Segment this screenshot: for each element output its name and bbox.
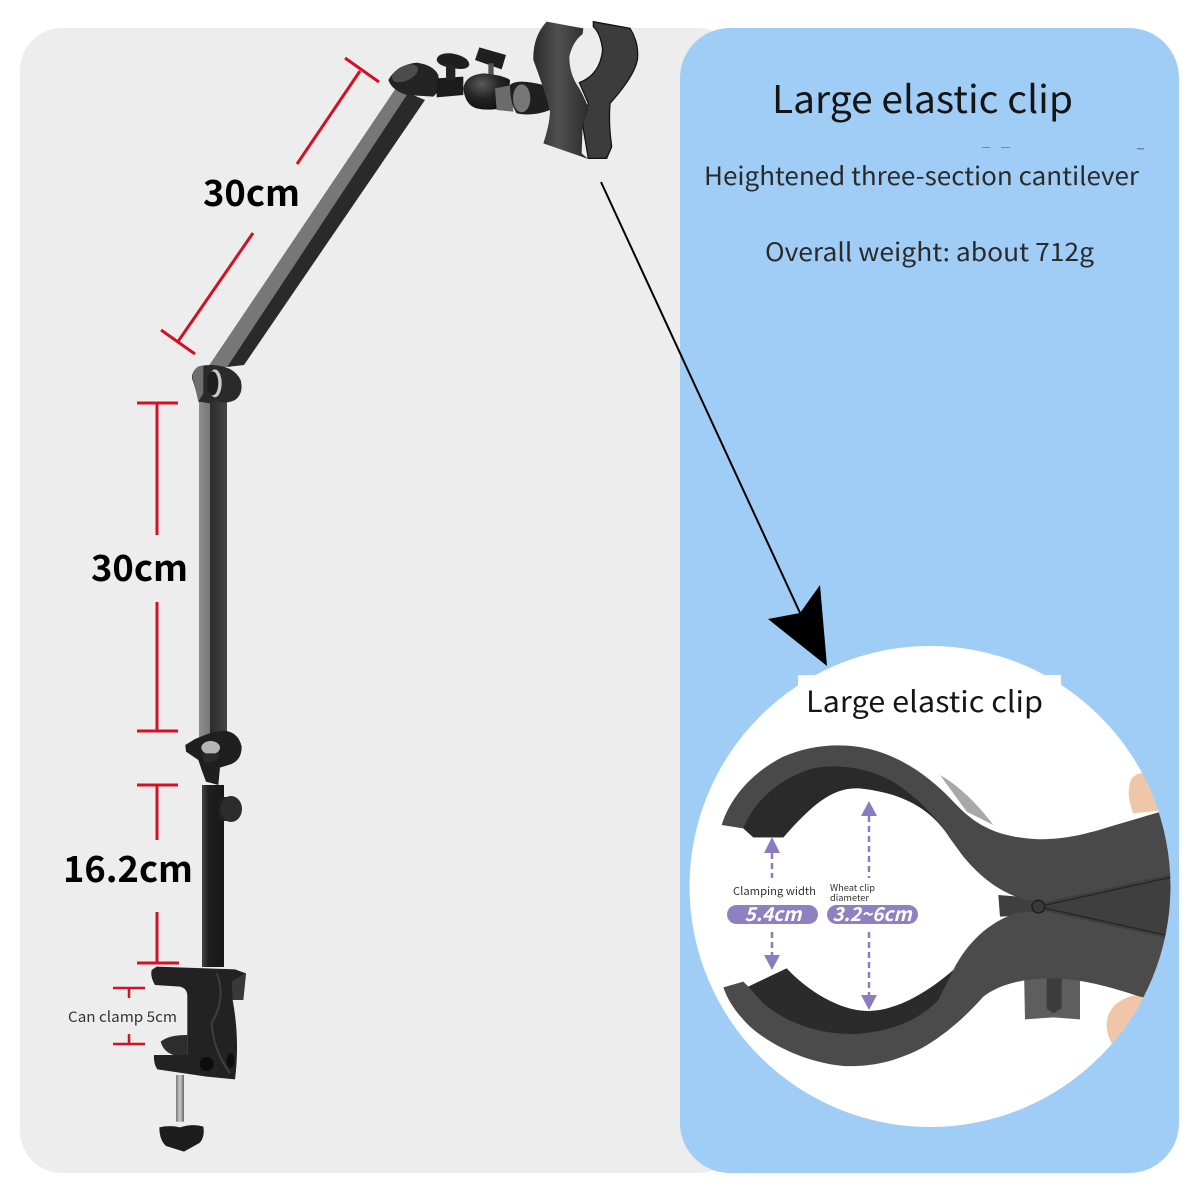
product: microphone clip and ball head <box>388 22 638 159</box>
clip: front jaw <box>533 22 588 159</box>
badge: 3.2~6cm: 3.2~6cm <box>832 900 913 927</box>
badge: 5.4cm <box>727 900 818 927</box>
label: clamping width: Clamping width <box>733 883 816 899</box>
title: large elastic clip: Large elastic clip <box>772 69 1073 124</box>
upper screw knob <box>161 1035 187 1055</box>
lower jaw <box>723 912 1190 1066</box>
lower jaw pad <box>748 968 953 1034</box>
rear highlights <box>940 775 994 825</box>
callout: white detail circle <box>690 646 1170 1127</box>
product: microphone boom arm <box>151 88 425 1152</box>
knob: post lock <box>218 796 242 822</box>
panel: gray product background <box>20 28 740 1173</box>
bottom knob <box>159 1125 204 1152</box>
label: clamp capacity: Can clamp 5cm <box>68 1006 177 1027</box>
panel: blue specification panel <box>680 28 1179 1173</box>
upper jaw <box>722 745 1190 902</box>
label: wheat clip diameter: Wheat clip <box>830 881 875 894</box>
badge: 5.4cm: 5.4cm <box>745 900 803 927</box>
ball head: square knob <box>475 47 506 75</box>
annotation: clamping width arrows <box>764 837 780 970</box>
text: overall weight: Overall weight: about 712g <box>765 233 1094 269</box>
fingers <box>1106 773 1158 1044</box>
joint: lower elbow <box>185 731 242 785</box>
faint scan marks <box>982 147 1144 150</box>
upper jaw pad <box>743 766 950 838</box>
text: three-section cantilever: Heightened three-section cantilever <box>704 157 1139 193</box>
label: lower post length: 16.2cm <box>63 841 193 893</box>
arrow: clip to detail <box>601 182 827 666</box>
joint: upper elbow <box>192 365 242 403</box>
dimension: lower post <box>137 785 179 963</box>
hinge pin <box>1032 900 1045 913</box>
illustration: elastic clip close-up <box>722 745 1190 1066</box>
arm: middle section <box>199 398 227 738</box>
label: middle arm length: 30cm <box>91 540 188 592</box>
annotation: clip diameter arrows <box>861 801 877 1010</box>
dimension: middle arm <box>137 403 178 731</box>
post: lower section <box>202 785 224 967</box>
label: wheat clip diameter: diameter <box>830 891 870 904</box>
rear stem <box>1024 978 1080 1020</box>
clamp body <box>151 967 246 1079</box>
dimension: upper arm <box>161 58 379 354</box>
ball head: body <box>463 73 550 114</box>
arm: upper section <box>208 88 425 367</box>
heading: detail circle: Large elastic clip <box>806 679 1043 721</box>
ball head: top joint <box>388 61 463 97</box>
ball head: round knob <box>437 53 469 80</box>
label: wheat clip diameter <box>830 881 875 904</box>
clamp: desk clamp assembly <box>151 967 246 1152</box>
dimension: clamp opening <box>113 988 145 1044</box>
threaded screw <box>176 1075 184 1122</box>
seam lines <box>1038 877 1173 937</box>
clip: rear jaw <box>579 22 638 158</box>
centre wedge <box>998 872 1170 940</box>
label: upper arm length: 30cm <box>203 165 300 217</box>
